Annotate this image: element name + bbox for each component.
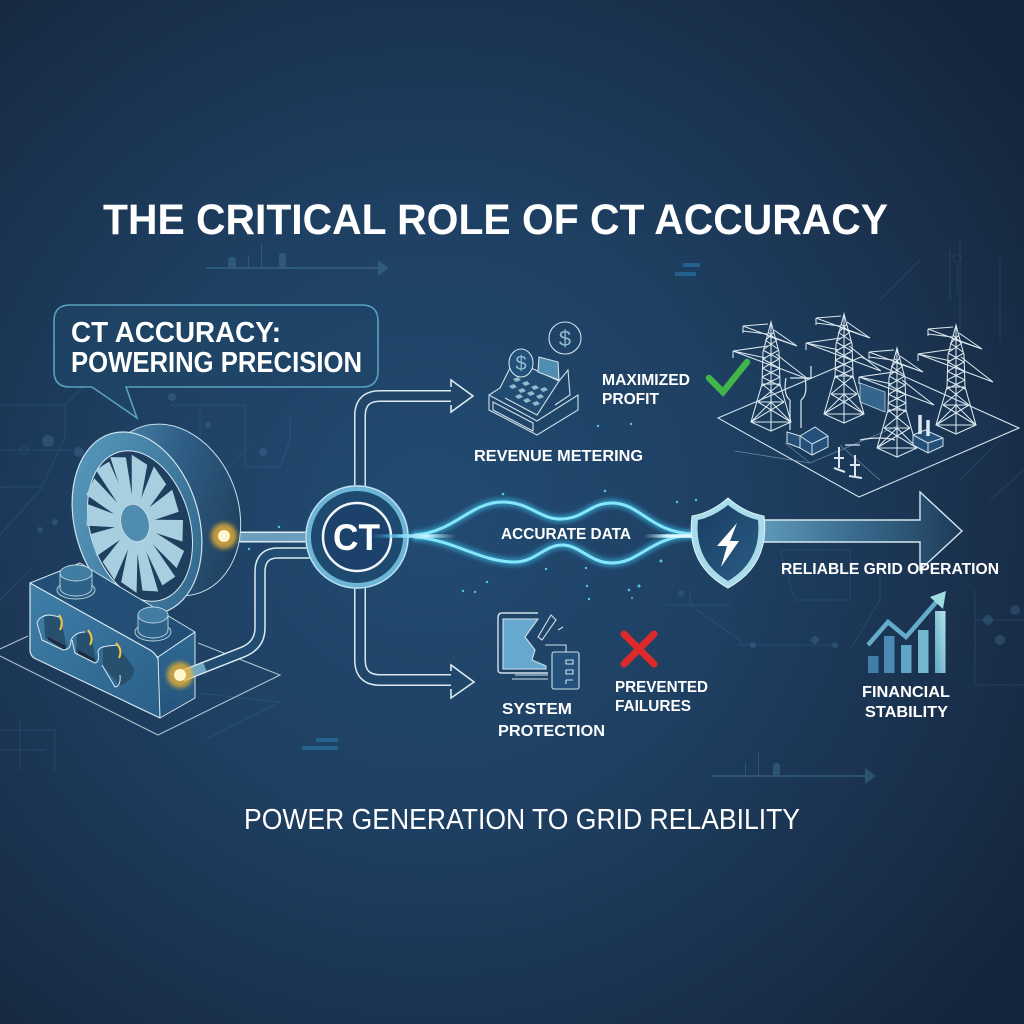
platform under generator	[0, 636, 280, 735]
pipe: generator box to CT	[182, 553, 312, 676]
label: financial stability	[862, 684, 950, 721]
label: prevented failures	[615, 679, 708, 715]
callout: CT accuracy: CT ACCURACY:	[71, 317, 281, 349]
glow: turbine port	[211, 523, 237, 549]
icon: red cross	[624, 634, 654, 664]
icon: green check	[709, 362, 747, 392]
label: prevented failures: FAILURES	[615, 698, 691, 715]
icon: cash register	[489, 322, 581, 435]
title: THE CRITICAL ROLE OF CT ACCURACY	[103, 196, 888, 244]
circuit trace background pattern	[0, 240, 1024, 770]
accurate data label: ACCURATE DATA	[501, 526, 631, 543]
chart: financial growth bars	[868, 591, 946, 673]
icon: cash register: $	[515, 353, 527, 375]
CT node	[306, 486, 408, 588]
label: revenue metering: REVENUE METERING	[474, 448, 643, 465]
pipe: turbine to CT	[224, 532, 310, 542]
label: prevented failures: PREVENTED	[615, 679, 708, 696]
dollar circle	[549, 322, 581, 354]
knobs	[57, 565, 171, 641]
label: financial stability: FINANCIAL	[862, 684, 950, 701]
label: maximized profit: MAXIMIZED	[602, 372, 690, 389]
label: system protection	[498, 701, 605, 740]
arrow: to system protection	[360, 575, 474, 698]
accurate data signal wave	[372, 502, 700, 563]
icon: cash register: $	[559, 326, 571, 351]
label: system protection: SYSTEM	[502, 701, 572, 718]
subtitle: POWER GENERATION TO GRID RELABILITY	[244, 804, 800, 836]
label: maximized profit	[602, 372, 690, 408]
label: maximized profit: PROFIT	[602, 391, 659, 408]
label: financial stability: STABILITY	[865, 704, 948, 721]
arrow: to revenue metering	[360, 380, 473, 500]
transformer	[860, 383, 885, 412]
arrow: reliable grid operation	[760, 492, 962, 570]
substation boxes	[787, 427, 943, 455]
faint arrow motif bottom	[712, 753, 876, 784]
sparkle particles	[248, 423, 697, 600]
callout: CT accuracy	[54, 305, 378, 418]
icon: generator box	[30, 563, 195, 718]
callout: CT accuracy: POWERING PRECISION	[71, 347, 362, 379]
faint data bars	[302, 263, 700, 750]
label: system protection: PROTECTION	[498, 723, 605, 740]
faint arrow motif top	[206, 243, 389, 276]
label: reliable grid operation: RELIABLE GRID OPERATION	[781, 561, 999, 578]
keypad	[509, 377, 548, 406]
icon: system protection	[498, 613, 579, 689]
control ports	[44, 616, 134, 686]
icon: shield with lightning	[691, 498, 765, 588]
glow: box port	[167, 662, 193, 688]
fan blades	[69, 442, 201, 606]
CT node: CT	[333, 517, 380, 558]
icon: turbine	[52, 404, 264, 629]
illustration: power grid substation	[718, 314, 1019, 497]
